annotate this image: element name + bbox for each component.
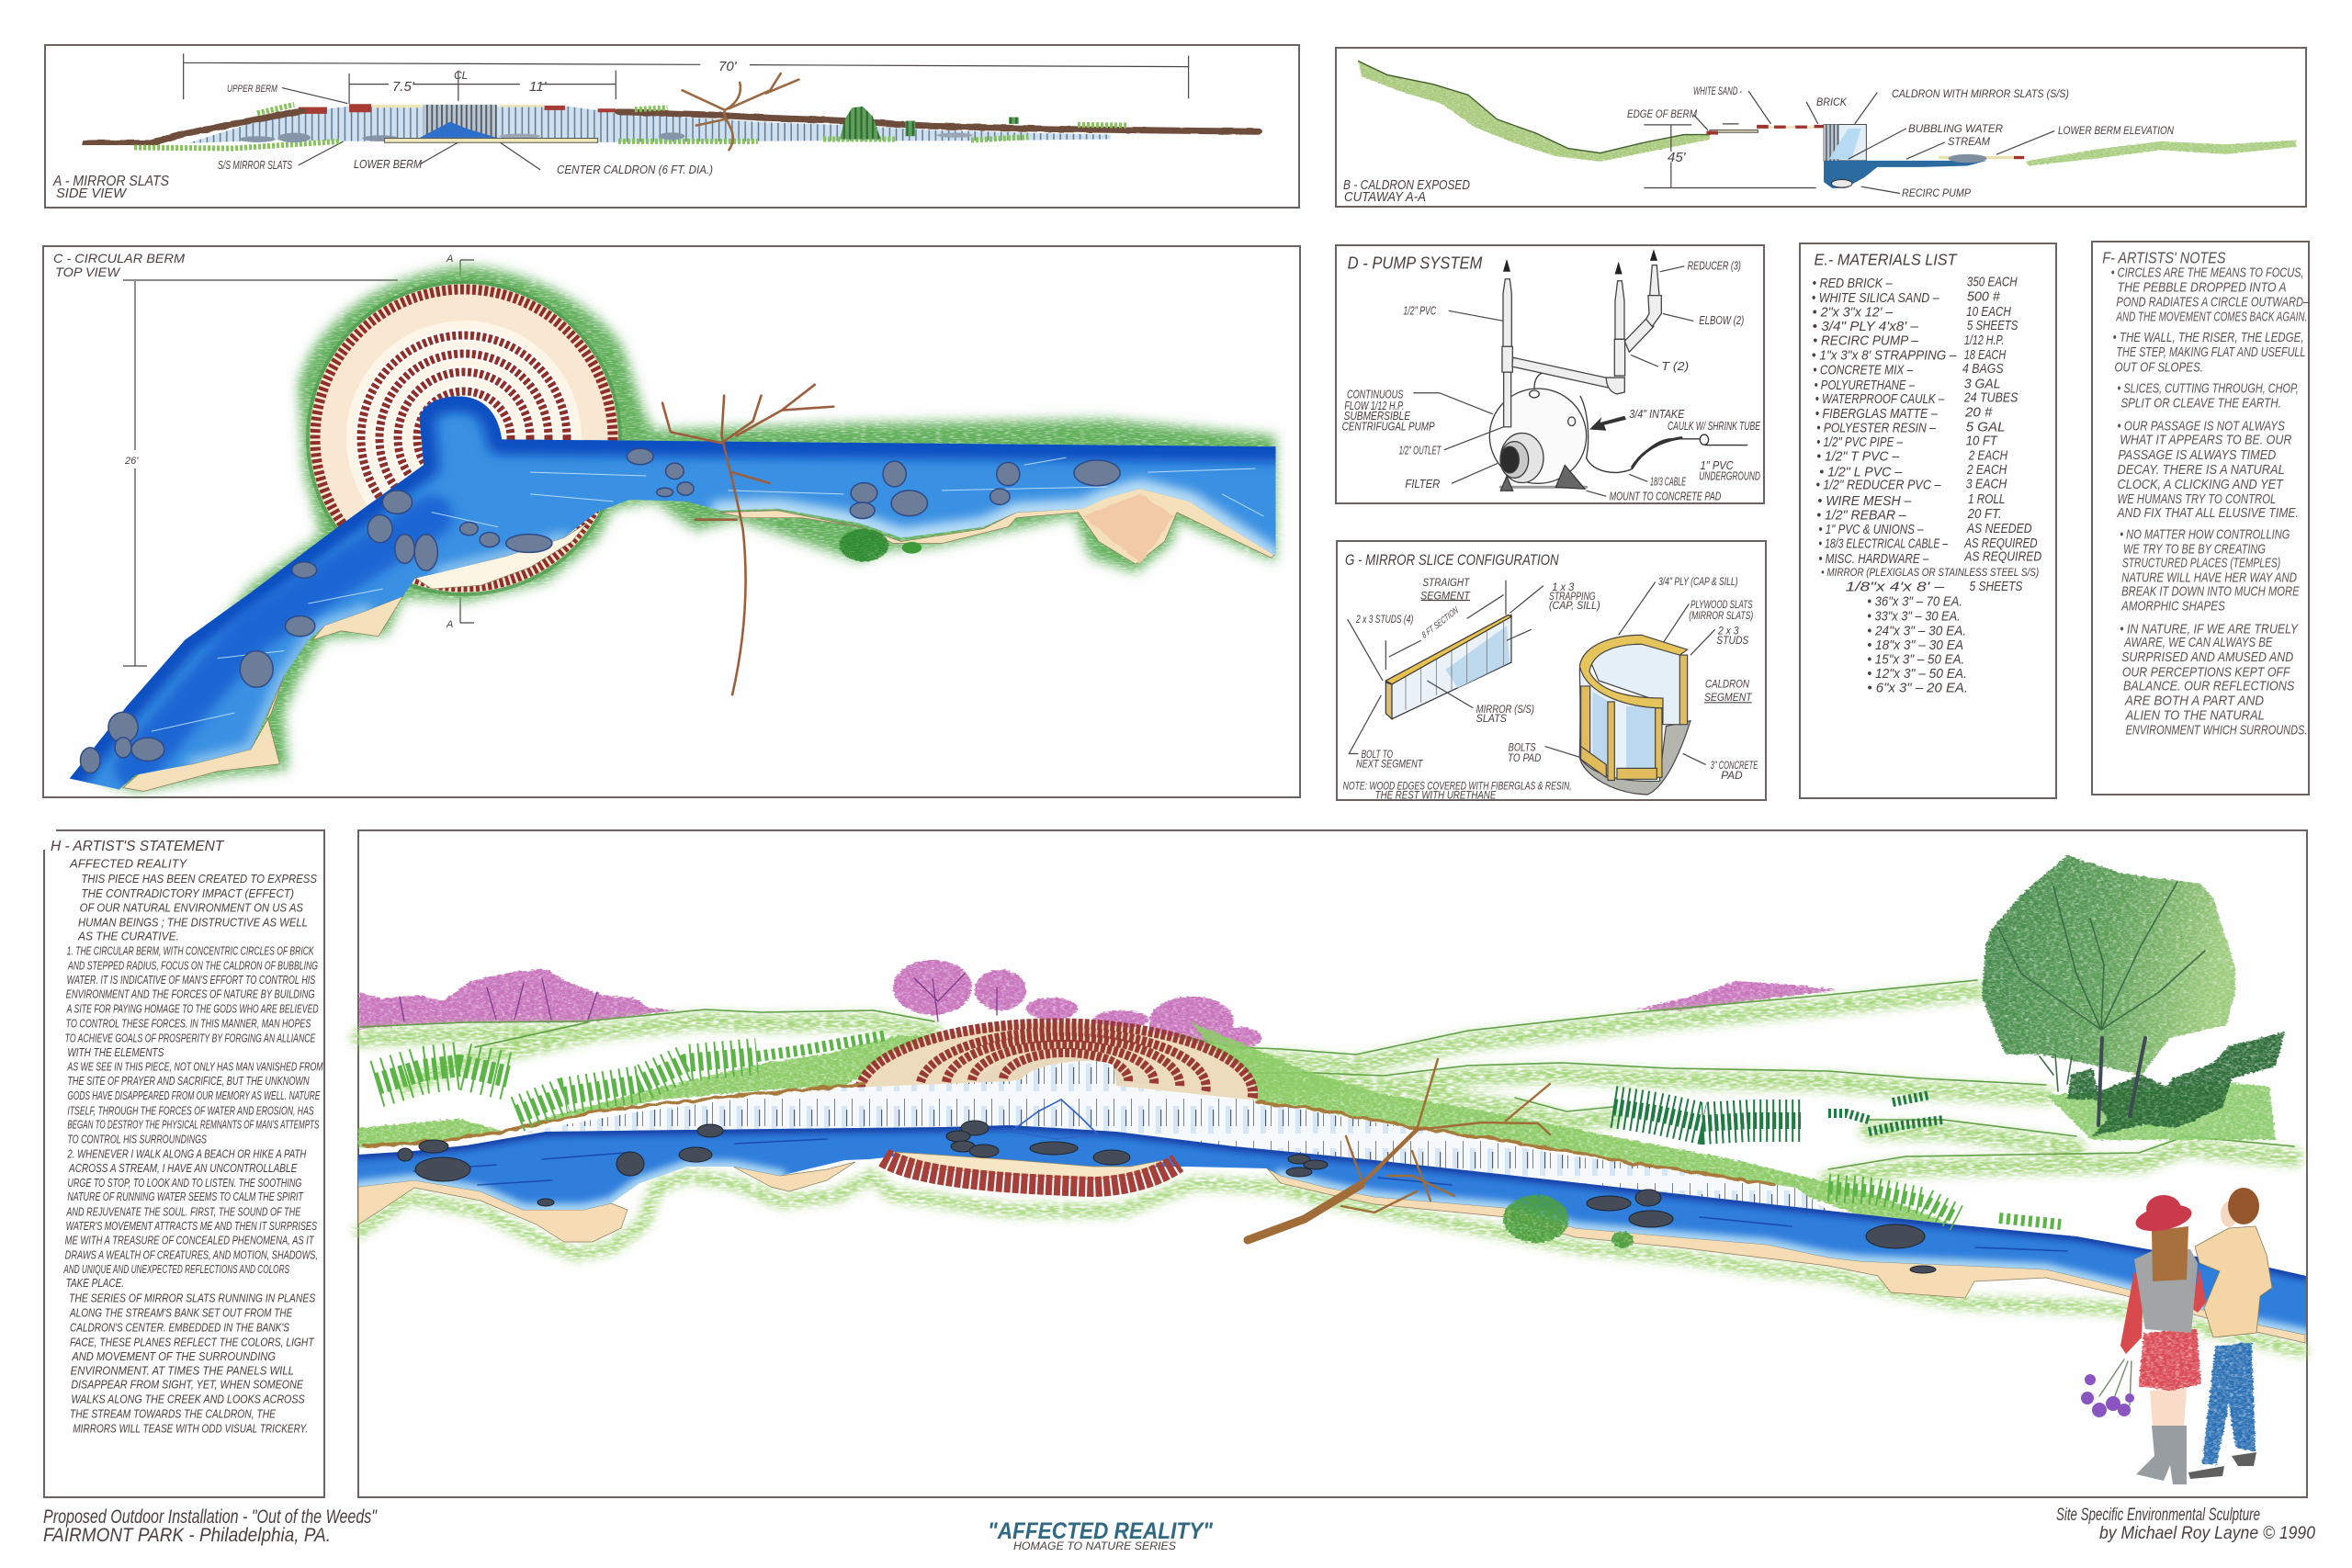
labels G: G - MIRROR SLICE CONFIGURATION [1345, 552, 1559, 569]
panel E: materials list: • RECIRC PUMP – [1813, 333, 1918, 348]
dark shrubs [2067, 1032, 2285, 1136]
caldron segment [1579, 635, 1690, 795]
lower berm and rocks [1939, 154, 2024, 163]
panel E: materials list: • 6"x 3" – 20 EA. [1867, 680, 1968, 695]
panel F: artist's notes: CLOCK, A CLICKING AND YET [2118, 477, 2284, 491]
rocks [80, 448, 1120, 773]
panel F: artist's notes: THE PEBBLE DROPPED INTO A [2118, 279, 2287, 295]
labels G: 2 x 3 STUDS (4) [1355, 614, 1413, 626]
panel H: artist's statement: TAKE PLACE. [66, 1276, 124, 1290]
labels G: (CAP, SILL) [1549, 600, 1600, 612]
labels D: ELBOW (2) [1699, 314, 1744, 327]
intake arrow [1589, 416, 1626, 431]
labels D: UNDERGROUND [1699, 470, 1760, 483]
panel E: materials list: • WHITE SILICA SAND – [1812, 289, 1939, 305]
panel H: artist's statement: AND REJUVENATE THE SOUL. FIRST, THE SOUND OF THE [66, 1204, 301, 1218]
panel H: artist's statement: 2. WHENEVER I WALK ALONG A BEACH OR HIKE A PATH [67, 1146, 307, 1160]
panel H: artist's statement: ITSELF, THROUGH THE FORCES OF WATER AND EROSION, HAS [67, 1103, 314, 1117]
vest [2134, 1249, 2198, 1333]
panel F: artist's notes: BREAK IT DOWN INTO MUCH MORE [2121, 583, 2300, 599]
labels A [52, 59, 738, 201]
bank green wedges [358, 1021, 1957, 1226]
panel E: materials list: • MIRROR (PLEXIGLAS OR STAINLESS STEEL S/S) [1821, 566, 2039, 579]
panel F: artist's notes: POND RADIATES A CIRCLE OUTWARD– [2116, 294, 2309, 310]
skirt [2139, 1329, 2201, 1391]
fountain [1011, 1100, 1098, 1139]
leader lines [1693, 91, 2054, 193]
labels G: NEXT SEGMENT [1356, 759, 1423, 771]
panel F: artist's notes: THE STEP, MAKING FLAT AND USEFULL [2116, 344, 2305, 359]
panel E: materials list: • MISC. HARDWARE – [1818, 551, 1929, 566]
panel E: materials list: AS REQUIRED [1963, 536, 2038, 550]
labels D: D - PUMP SYSTEM [1348, 254, 1483, 273]
panel F: artist's notes: WE HUMANS TRY TO CONTROL [2118, 491, 2276, 506]
panel H: artist's statement: 1. THE CIRCULAR BERM, WITH CONCENTRIC CIRCLES OF BRICK [67, 943, 314, 957]
labels G: SEGMENT [1420, 591, 1471, 603]
panel E: materials list: • 1" PVC & UNIONS – [1818, 522, 1924, 536]
panel E: materials list: 4 BAGS [1962, 361, 2004, 376]
upper berm with brick arcs [855, 1022, 1257, 1100]
labels B: WHITE SAND - [1693, 85, 1742, 97]
footer centre: title: HOMAGE TO NATURE SERIES [1013, 1540, 1176, 1552]
panel F: artist's notes: ALIEN TO THE NATURAL [2125, 707, 2265, 723]
bare tree [683, 73, 798, 150]
panel H: artist's statement: H - ARTIST'S STATEMENT [51, 839, 225, 854]
labels G: PLYWOOD SLATS [1690, 599, 1753, 611]
panel F: artist's notes: OUR PERCEPTIONS KEPT OFF [2122, 664, 2291, 680]
labels G: THE REST WITH URETHANE [1375, 790, 1497, 802]
labels A: CL [454, 69, 468, 82]
panel E: materials list: • 1/2" T PVC – [1816, 448, 1899, 464]
shoes [2188, 1452, 2256, 1479]
panel E: materials list: 10 EACH [1966, 304, 2012, 319]
dimension 26 ft [123, 260, 474, 666]
woman figure [2081, 1195, 2206, 1484]
tree trunks [2098, 1038, 2145, 1125]
hair [2152, 1226, 2188, 1281]
panel E: materials list: • POLYESTER RESIN – [1816, 420, 1936, 435]
labels B: CUTAWAY A-A [1344, 189, 1426, 205]
labels D: FILTER [1405, 478, 1441, 491]
panel F: artist's notes: STRUCTURED PLACES (TEMPLES) [2122, 555, 2280, 570]
labels C: TOP VIEW [55, 265, 121, 279]
panel H: artist's statement: DRAWS A WEALTH OF CREATURES, AND MOTION, SHADOWS, [65, 1247, 318, 1261]
labels D: T (2) [1661, 360, 1689, 373]
panel: main perspective view [358, 830, 2311, 1497]
panel E: materials list: • 18/3 ELECTRICAL CABLE – [1818, 536, 1948, 551]
panel H: artist's statement: AFFECTED REALITY [69, 856, 187, 870]
footer right: signature: Site Specific Environmental Sculpture [2056, 1506, 2260, 1525]
labels G: BOLTS [1509, 742, 1536, 754]
stream and pit water [1824, 161, 1987, 188]
legs [2150, 1388, 2187, 1426]
panel H: artist's statement: TO CONTROL THESE FORCES. IN THIS MANNER, MAN HOPES [66, 1016, 311, 1030]
panel F: artist's notes: • OUR PASSAGE IS NOT ALWAYS [2118, 418, 2285, 433]
sand banks [123, 487, 1275, 791]
big green tree [1982, 855, 2235, 1091]
panel F: artist's notes: • IN NATURE, IF WE ARE TRUELY [2120, 621, 2300, 636]
labels A: CENTER CALDRON (6 FT. DIA.) [557, 163, 713, 176]
labels A: 11' [529, 79, 548, 95]
panel F: artist's notes: SURPRISED AND AMUSED AND [2121, 649, 2293, 664]
panel E: materials list: • FIBERGLAS MATTE – [1815, 405, 1938, 421]
panel H: artist's statement: ACROSS A STREAM, I HAVE AN UNCONTROLLABLE [68, 1161, 298, 1175]
bank shrubs [1503, 1195, 1634, 1248]
panel E: materials list: 3 GAL [1964, 376, 2001, 391]
panel H: artist's statement: AS THE CURATIVE. [77, 930, 179, 943]
stream water [55, 386, 1277, 799]
panel E: materials list: 18 EACH [1964, 346, 2007, 362]
panel H: artist's statement: AND STEPPED RADIUS, FOCUS ON THE CALDRON OF BUBBLING [67, 958, 318, 972]
panel F: artist's notes: SPLIT OR CLEAVE THE EARTH. [2120, 395, 2281, 411]
panel E: materials list: 5 SHEETS [1967, 318, 2018, 333]
labels G: 3" CONCRETE [1711, 760, 1758, 772]
labels G: 8 FT SECTION [1420, 605, 1460, 641]
caldron and splash [420, 105, 497, 138]
labels G: SLATS [1476, 713, 1507, 725]
panel H: artist's statement: CALDRON'S CENTER. EMBEDDED IN THE BANK'S [70, 1320, 289, 1334]
panel E: materials list: AS REQUIRED [1963, 548, 2041, 564]
panel F: artist's notes: OUT OF SLOPES. [2115, 359, 2203, 375]
panel H: artist's statement: WATER'S MOVEMENT ATTRACTS ME AND THEN IT SURPRISES [66, 1219, 317, 1233]
labels C: C - CIRCULAR BERM [53, 251, 185, 265]
hair [2228, 1188, 2259, 1224]
labels G: TO PAD [1508, 752, 1541, 764]
left green slope [1359, 62, 1710, 162]
panel F: artist's notes: • CIRCLES ARE THE MEANS TO FOCUS, [2111, 265, 2304, 279]
labels D: 1/2" OUTLET [1399, 445, 1442, 457]
panel G: mirror slice configuration [1337, 541, 1766, 802]
pump body [1489, 372, 1589, 491]
panel E: materials list: 5 SHEETS [1970, 578, 2023, 593]
labels G: STUDS [1716, 635, 1749, 647]
panel H: artist's statement: DISAPPEAR FROM SIGHT, YET, WHEN SOMEONE [71, 1378, 304, 1392]
panel E: materials list: 350 EACH [1967, 274, 2018, 289]
footer left: proposal: FAIRMONT PARK - Philadelphia, PA. [43, 1525, 331, 1546]
jacket [2195, 1226, 2272, 1337]
panel E: materials list: 20 # [1964, 404, 1993, 420]
panel F: artist's notes: AMORPHIC SHAPES [2120, 598, 2225, 614]
labels G: PAD [1721, 770, 1743, 782]
panel H: artist's statement: ALONG THE STREAM'S BANK SET OUT FROM THE [69, 1306, 293, 1320]
panel F: artist's notes: • SLICES, CUTTING THROUGH, CHOP, [2118, 380, 2299, 396]
sleeves [2120, 1268, 2206, 1354]
panel H: artist's statement: WATER. IT IS INDICATIVE OF MAN'S EFFORT TO CONTROL HIS [67, 973, 315, 987]
labels G [1343, 552, 1758, 802]
ground shadow [1500, 486, 1587, 489]
lower brick crescent [884, 1152, 1178, 1187]
panel H: artist's statement: ENVIRONMENT. AT TIMES THE PANELS WILL [71, 1364, 294, 1378]
panel H: artist's statement: THIS PIECE HAS BEEN CREATED TO EXPRESS [81, 872, 317, 886]
labels G: BOLT TO [1362, 749, 1393, 761]
labels B: B - CALDRON EXPOSED [1343, 177, 1470, 193]
panel D: pump system [1336, 245, 1764, 503]
panel E: materials list: 3 EACH [1966, 476, 2007, 491]
panel H: artist's statement: GODS HAVE DISAPPEARED FROM OUR MEMORY AS WELL. NATURE [67, 1089, 321, 1102]
panel H: artist's statement: TO CONTROL HIS SURROUNDINGS [67, 1132, 207, 1145]
panel A: mirror slats side view [45, 45, 1299, 208]
rocks and lower berm [239, 132, 973, 142]
panel F: artist's notes: F- ARTISTS' NOTES [2102, 249, 2226, 267]
panel E: materials list: 2 EACH [1966, 462, 2007, 477]
panel E: materials list: • 2"x 3"x 12' – [1813, 304, 1894, 320]
labels B: BUBBLING WATER [1908, 122, 2003, 135]
dimension lines [184, 53, 1189, 170]
panel F: artist's notes: BALANCE. OUR REFLECTIONS [2123, 678, 2295, 694]
sand banks [358, 1162, 2305, 1343]
panel F: artist's notes: PASSAGE IS ALWAYS TIMED [2118, 447, 2276, 462]
labels D: FLOW 1/12 H.P. [1344, 400, 1404, 412]
labels D: MOUNT TO CONCRETE PAD [1610, 491, 1722, 503]
panel E: materials list: 1/8"x 4'x 8' – [1846, 579, 1945, 594]
panel H: artist's statement: AS WE SEE IN THIS PIECE, NOT ONLY HAS MAN VANISHED FROM [67, 1059, 323, 1073]
purple tree branches [400, 974, 997, 1021]
labels G: CALDRON [1705, 679, 1750, 691]
right green slope [2026, 141, 2296, 166]
cable and caulk [1587, 439, 1747, 472]
boots [2136, 1426, 2187, 1484]
fallen tree [1248, 1059, 1550, 1240]
panel H: artist's statement: OF OUR NATURAL ENVIRONMENT ON US AS [80, 900, 303, 914]
dimension 45 ft [1644, 124, 1816, 187]
panel E: materials list: • 3/4" PLY 4'x8' – [1813, 318, 1918, 333]
panel F: artist's notes [2092, 242, 2309, 795]
panel E: materials list: 5 GAL [1966, 419, 2005, 434]
main stream [358, 1121, 2311, 1341]
panel E: materials list: • 15"x 3" – 50 EA. [1867, 651, 1964, 667]
labels G: (MIRROR SLATS) [1689, 610, 1753, 622]
stream rocks [398, 1121, 1936, 1273]
panel E: materials list: • WIRE MESH – [1817, 492, 1912, 508]
labels G: 2 x 3 [1717, 626, 1739, 637]
labels B: LOWER BERM ELEVATION [2058, 124, 2174, 137]
labels G: STRAIGHT [1422, 577, 1470, 589]
pipes [1502, 265, 1661, 427]
labels C [53, 251, 453, 630]
panel E: materials list: • 1/2" REDUCER PVC – [1815, 477, 1941, 492]
bright green plants [377, 1035, 2061, 1224]
labels G: STRAPPING [1549, 591, 1596, 603]
panel F: artist's notes: DECAY. THERE IS A NATURAL [2118, 462, 2285, 477]
footer right: signature [2056, 1506, 2315, 1543]
footer centre: title: "AFFECTED REALITY" [988, 1518, 1214, 1544]
labels D: 1" PVC [1701, 459, 1734, 472]
face [2221, 1201, 2237, 1227]
panel E: materials list: 10 FT [1966, 433, 1998, 448]
green surround [95, 266, 1275, 791]
panel E: materials list: E.- MATERIALS LIST [1815, 251, 1958, 269]
panel H: artist's statement: WALKS ALONG THE CREEK AND LOOKS ACROSS [71, 1393, 305, 1406]
labels B: STREAM [1948, 135, 1990, 148]
bouquet [2081, 1359, 2134, 1417]
labels B [1343, 85, 2174, 205]
jeans [2202, 1343, 2256, 1464]
upper berm bricks [299, 104, 616, 114]
panel E: materials list: AS NEEDED [1966, 521, 2032, 536]
labels A: 7.5' [392, 79, 415, 95]
panel E: materials list: • 1/2" L PVC – [1819, 464, 1902, 479]
footer left: proposal [43, 1506, 378, 1546]
labels G: 1 x 3 [1552, 581, 1575, 593]
labels D: CAULK W/ SHRINK TUBE [1668, 420, 1760, 433]
labels G: NOTE: WOOD EDGES COVERED WITH FIBERGLAS & RESIN, [1343, 781, 1572, 793]
panel B: caldron exposed cutaway [1336, 48, 2306, 207]
panel E: materials list: 2 EACH [1968, 447, 2008, 463]
panel H: artist's statement: BEGAN TO DESTROY THE PHYSICAL REMNANTS OF MAN'S ATTEMPTS [67, 1118, 319, 1132]
labels A: LOWER BERM [354, 157, 422, 171]
labels G: SEGMENT [1704, 692, 1753, 704]
labels A: S/S MIRROR SLATS [218, 158, 292, 172]
dimension 26 ft: 26' [124, 456, 139, 467]
dimension and leaders [1348, 581, 1752, 764]
water ripples [152, 457, 1263, 731]
panel C: circular berm top view [43, 246, 1300, 799]
shrubs [840, 529, 922, 561]
brick berm rings [308, 282, 620, 594]
panel E: materials list: • POLYURETHANE – [1815, 377, 1915, 392]
panel F: artist's notes: AWARE, WE CAN ALWAYS BE [2123, 635, 2273, 649]
panel E: materials list: 500 # [1967, 288, 2000, 304]
mirror slats wall [187, 107, 1111, 143]
panel E: materials list: • 36"x 3" – 70 EA. [1867, 593, 1962, 609]
panel F: artist's notes: AND FIX THAT ALL ELUSIVE TIME. [2117, 505, 2299, 520]
panel E: materials list: • 33"x 3" – 30 EA. [1867, 608, 1961, 623]
panel E: materials list: • CONCRETE MIX – [1813, 362, 1913, 378]
panel E: materials list: • 12"x 3" – 50 EA. [1867, 666, 1967, 681]
panel H: artist's statement: TO ACHIEVE GOALS OF PROSPERITY BY FORGING AN ALLIANCE [65, 1031, 316, 1044]
labels D: 1/2" PVC [1403, 305, 1437, 318]
labels A: 70' [718, 59, 738, 74]
panel E: materials list: 1/12 H.P. [1964, 333, 2004, 347]
panel H: artist's statement: AND MOVEMENT OF THE SURROUNDING [71, 1349, 276, 1363]
man figure [2188, 1188, 2272, 1479]
shrub [840, 107, 1019, 140]
hill ridge lines [360, 980, 2294, 1169]
bank green halo below stream [360, 1176, 2301, 1350]
labels D [1342, 254, 1760, 503]
pink sand mound [1082, 494, 1174, 563]
labels B: BRICK [1816, 96, 1848, 108]
panel E: materials list: • RED BRICK – [1813, 276, 1893, 290]
panel F: artist's notes: NATURE WILL HAVE HER WAY AND [2121, 570, 2297, 585]
labels D: 18/3 CABLE [1650, 476, 1686, 489]
panel F: artist's notes: • NO MATTER HOW CONTROLLING [2120, 526, 2290, 542]
panel H: artist's statement: MIRRORS WILL TEASE WITH ODD VISUAL TRICKERY. [73, 1421, 308, 1435]
panel H: artist's statement: NATURE OF RUNNING WATER SEEMS TO CALM THE SPIRIT [67, 1190, 304, 1203]
labels A: A - MIRROR SLATS [52, 174, 169, 189]
panel H: artist's statement: AND UNIQUE AND UNEXPECTED REFLECTIONS AND COLORS [63, 1262, 289, 1276]
hat [2133, 1195, 2194, 1235]
panel H: artist's statement: THE SITE OF PRAYER AND SACRIFICE, BUT THE UNKNOWN [67, 1074, 310, 1088]
panel H: artist's statement: A SITE FOR PAYING HOMAGE TO THE GODS WHO ARE BELIEVED [66, 1002, 319, 1016]
panel E: materials list: • 24"x 3" – 30 EA. [1867, 623, 1966, 637]
panel E: materials list: 20 FT. [1967, 506, 2002, 521]
labels A: SIDE VIEW [56, 186, 128, 201]
panel H: artist's statement: WITH THE ELEMENTS [67, 1045, 164, 1059]
panel F: artist's notes: ARE BOTH A PART AND [2124, 693, 2264, 708]
panel E: materials list: • 1/2" REBAR – [1816, 507, 1906, 522]
panel E: materials list: • 18"x 3" – 30 EA [1867, 637, 1963, 652]
labels B: CALDRON WITH MIRROR SLATS (S/S) [1892, 87, 2069, 100]
labels D: CONTINUOUS [1347, 388, 1403, 401]
mirror slat wall [499, 1061, 1828, 1211]
labels C: A [446, 254, 453, 265]
straight segment [1385, 615, 1511, 719]
panel E: materials list [1800, 243, 2056, 798]
labels G: 3/4" PLY (CAP & SILL) [1658, 576, 1738, 588]
light green under big tree [2046, 1083, 2276, 1140]
flow arrows [1503, 249, 1657, 275]
panel E: materials list: 24 TUBES [1963, 389, 2018, 405]
panel F: artist's notes: ENVIRONMENT WHICH SURROUNDS. [2126, 722, 2307, 737]
leader lines [1413, 266, 1693, 496]
panel H: artist's statement: ENVIRONMENT AND THE FORCES OF NATURE BY BUILDING [66, 987, 315, 1001]
footer right: signature: by Michael Roy Layne © 1990 [2099, 1524, 2315, 1543]
labels C: A [446, 619, 453, 630]
earth band [85, 111, 1258, 143]
panel F: artist's notes: • THE WALL, THE RISER, THE LEDGE, [2113, 330, 2304, 344]
footer left: proposal: Proposed Outdoor Installation - "Out of the Weeds" [43, 1506, 378, 1528]
panel E: materials list: • 1"x 3"x 8' STRAPPING – [1812, 347, 1957, 363]
panel H: artist's statement: ME WITH A TREASURE OF CONCEALED PHENOMENA, AS IT [65, 1233, 314, 1247]
labels G: MIRROR (S/S) [1476, 704, 1534, 716]
caldron with mirror slats [1824, 125, 1866, 161]
panel E: materials list: 1 ROLL [1968, 491, 2005, 506]
panel H: artist's statement [44, 830, 324, 1497]
panel E: materials list: • 1/2" PVC PIPE – [1816, 434, 1903, 449]
labels D: SUBMERSIBLE [1344, 410, 1410, 423]
labels D: REDUCER (3) [1688, 260, 1741, 273]
panel E: materials list: • WATERPROOF CAULK – [1815, 391, 1945, 406]
dark grass [1613, 1095, 1943, 1132]
labels B: RECIRC PUMP [1902, 186, 1971, 199]
hill washes below ridges [360, 991, 2294, 1180]
panel H: artist's statement: THE STREAM TOWARDS THE CALDRON, THE [70, 1407, 277, 1421]
tree [662, 385, 833, 694]
distant purple trees [359, 960, 1836, 1049]
labels B: 45' [1668, 150, 1687, 165]
labels D: 3/4" INTAKE [1629, 408, 1684, 421]
labels D: CENTRIFUGAL PUMP [1342, 420, 1435, 434]
panel H: artist's statement: THE CONTRADICTORY IMPACT (EFFECT) [81, 886, 294, 900]
panel H: artist's statement: URGE TO STOP, TO LOOK AND TO LISTEN. THE SOOTHING [67, 1176, 301, 1190]
panel H: artist's statement: THE SERIES OF MIRROR SLATS RUNNING IN PLANES [69, 1292, 315, 1305]
panel F: artist's notes: WE TRY TO BE BY CREATING [2123, 541, 2266, 557]
recirc pump [1831, 180, 1852, 187]
panel H: artist's statement: FACE, THESE PLANES REFLECT THE COLORS, LIGHT [70, 1335, 314, 1348]
ground vegetation [134, 105, 1127, 149]
berm and bricks [1706, 125, 1824, 135]
labels A: UPPER BERM [227, 84, 278, 95]
panel H: artist's statement: HUMAN BEINGS ; THE DISTRUCTIVE AS WELL [78, 915, 308, 929]
brown earth edge [363, 1084, 1773, 1185]
panel F: artist's notes: WHAT IT APPEARS TO BE. OUR [2120, 432, 2291, 446]
labels B: EDGE OF BERM [1627, 107, 1697, 120]
